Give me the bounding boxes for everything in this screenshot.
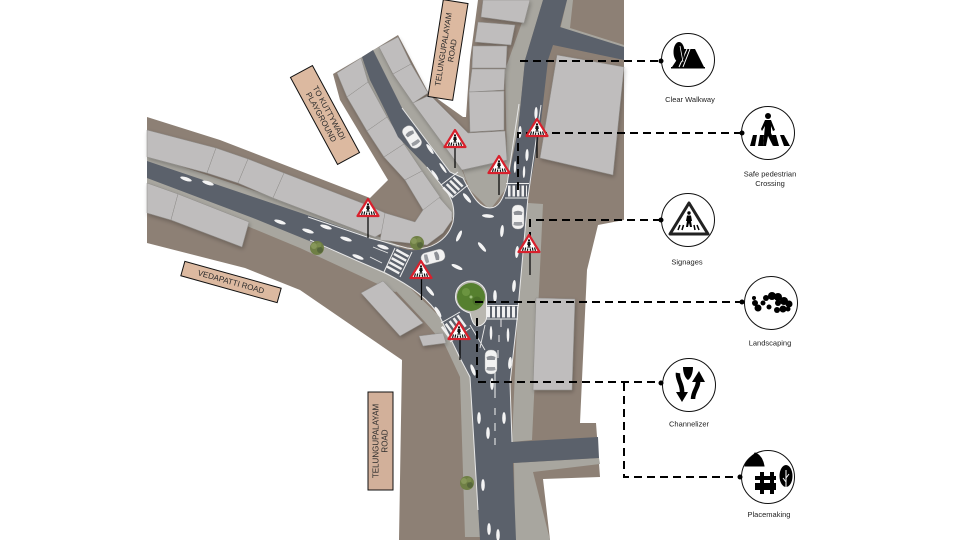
icon: placemaking [738, 450, 794, 519]
buildings [147, 0, 624, 390]
label: Telungupalayam road top: TELUNGUPALAYAM [433, 12, 454, 87]
warning signs [358, 119, 548, 339]
cars [400, 124, 424, 150]
lane dashes [180, 175, 192, 183]
icon: clear walkway [658, 34, 715, 104]
icon: channelizer: Channelizer [669, 420, 710, 428]
icon: safe pedestrian crossing: Safe pedestrian [744, 170, 796, 178]
label: Vedapatti road: VEDAPATTI ROAD [197, 268, 265, 296]
label: to Kuttywadi playground: PLAYGROUND [304, 91, 338, 144]
label: to Kuttywadi playground [290, 66, 360, 164]
trees [310, 241, 324, 255]
icon: safe pedestrian crossing [740, 106, 796, 188]
icon: channelizer [658, 358, 716, 428]
label: Telungupalayam road bottom: TELUNGUPALAYAM [372, 404, 380, 478]
label: Telungupalayam road top [428, 0, 468, 100]
carriageway markings [180, 104, 541, 540]
warning sign posts [368, 135, 537, 360]
map ground [147, 0, 624, 540]
crosswalks [384, 172, 529, 342]
label: to Kuttywadi playground: TO KUTTYWADI [311, 84, 347, 141]
icon: placemaking: Placemaking [748, 510, 790, 519]
label: Telungupalayam road top: ROAD [446, 38, 459, 63]
label: Telungupalayam road bottom [368, 392, 393, 490]
roundabout island [456, 281, 486, 326]
icon: safe pedestrian crossing: Crossing [755, 179, 785, 188]
icon: signages: Signages [671, 258, 703, 266]
label: Vedapatti road [181, 261, 281, 303]
icon: landscaping: Landscaping [749, 338, 791, 348]
road network [147, 0, 624, 540]
label: Telungupalayam road bottom: ROAD [380, 429, 390, 453]
connector dashed lines [475, 61, 742, 477]
concrete sidewalks [147, 0, 624, 540]
icon: landscaping [740, 276, 798, 348]
icon: signages [658, 194, 714, 266]
icon: clear walkway: Clear Walkway [665, 95, 715, 104]
